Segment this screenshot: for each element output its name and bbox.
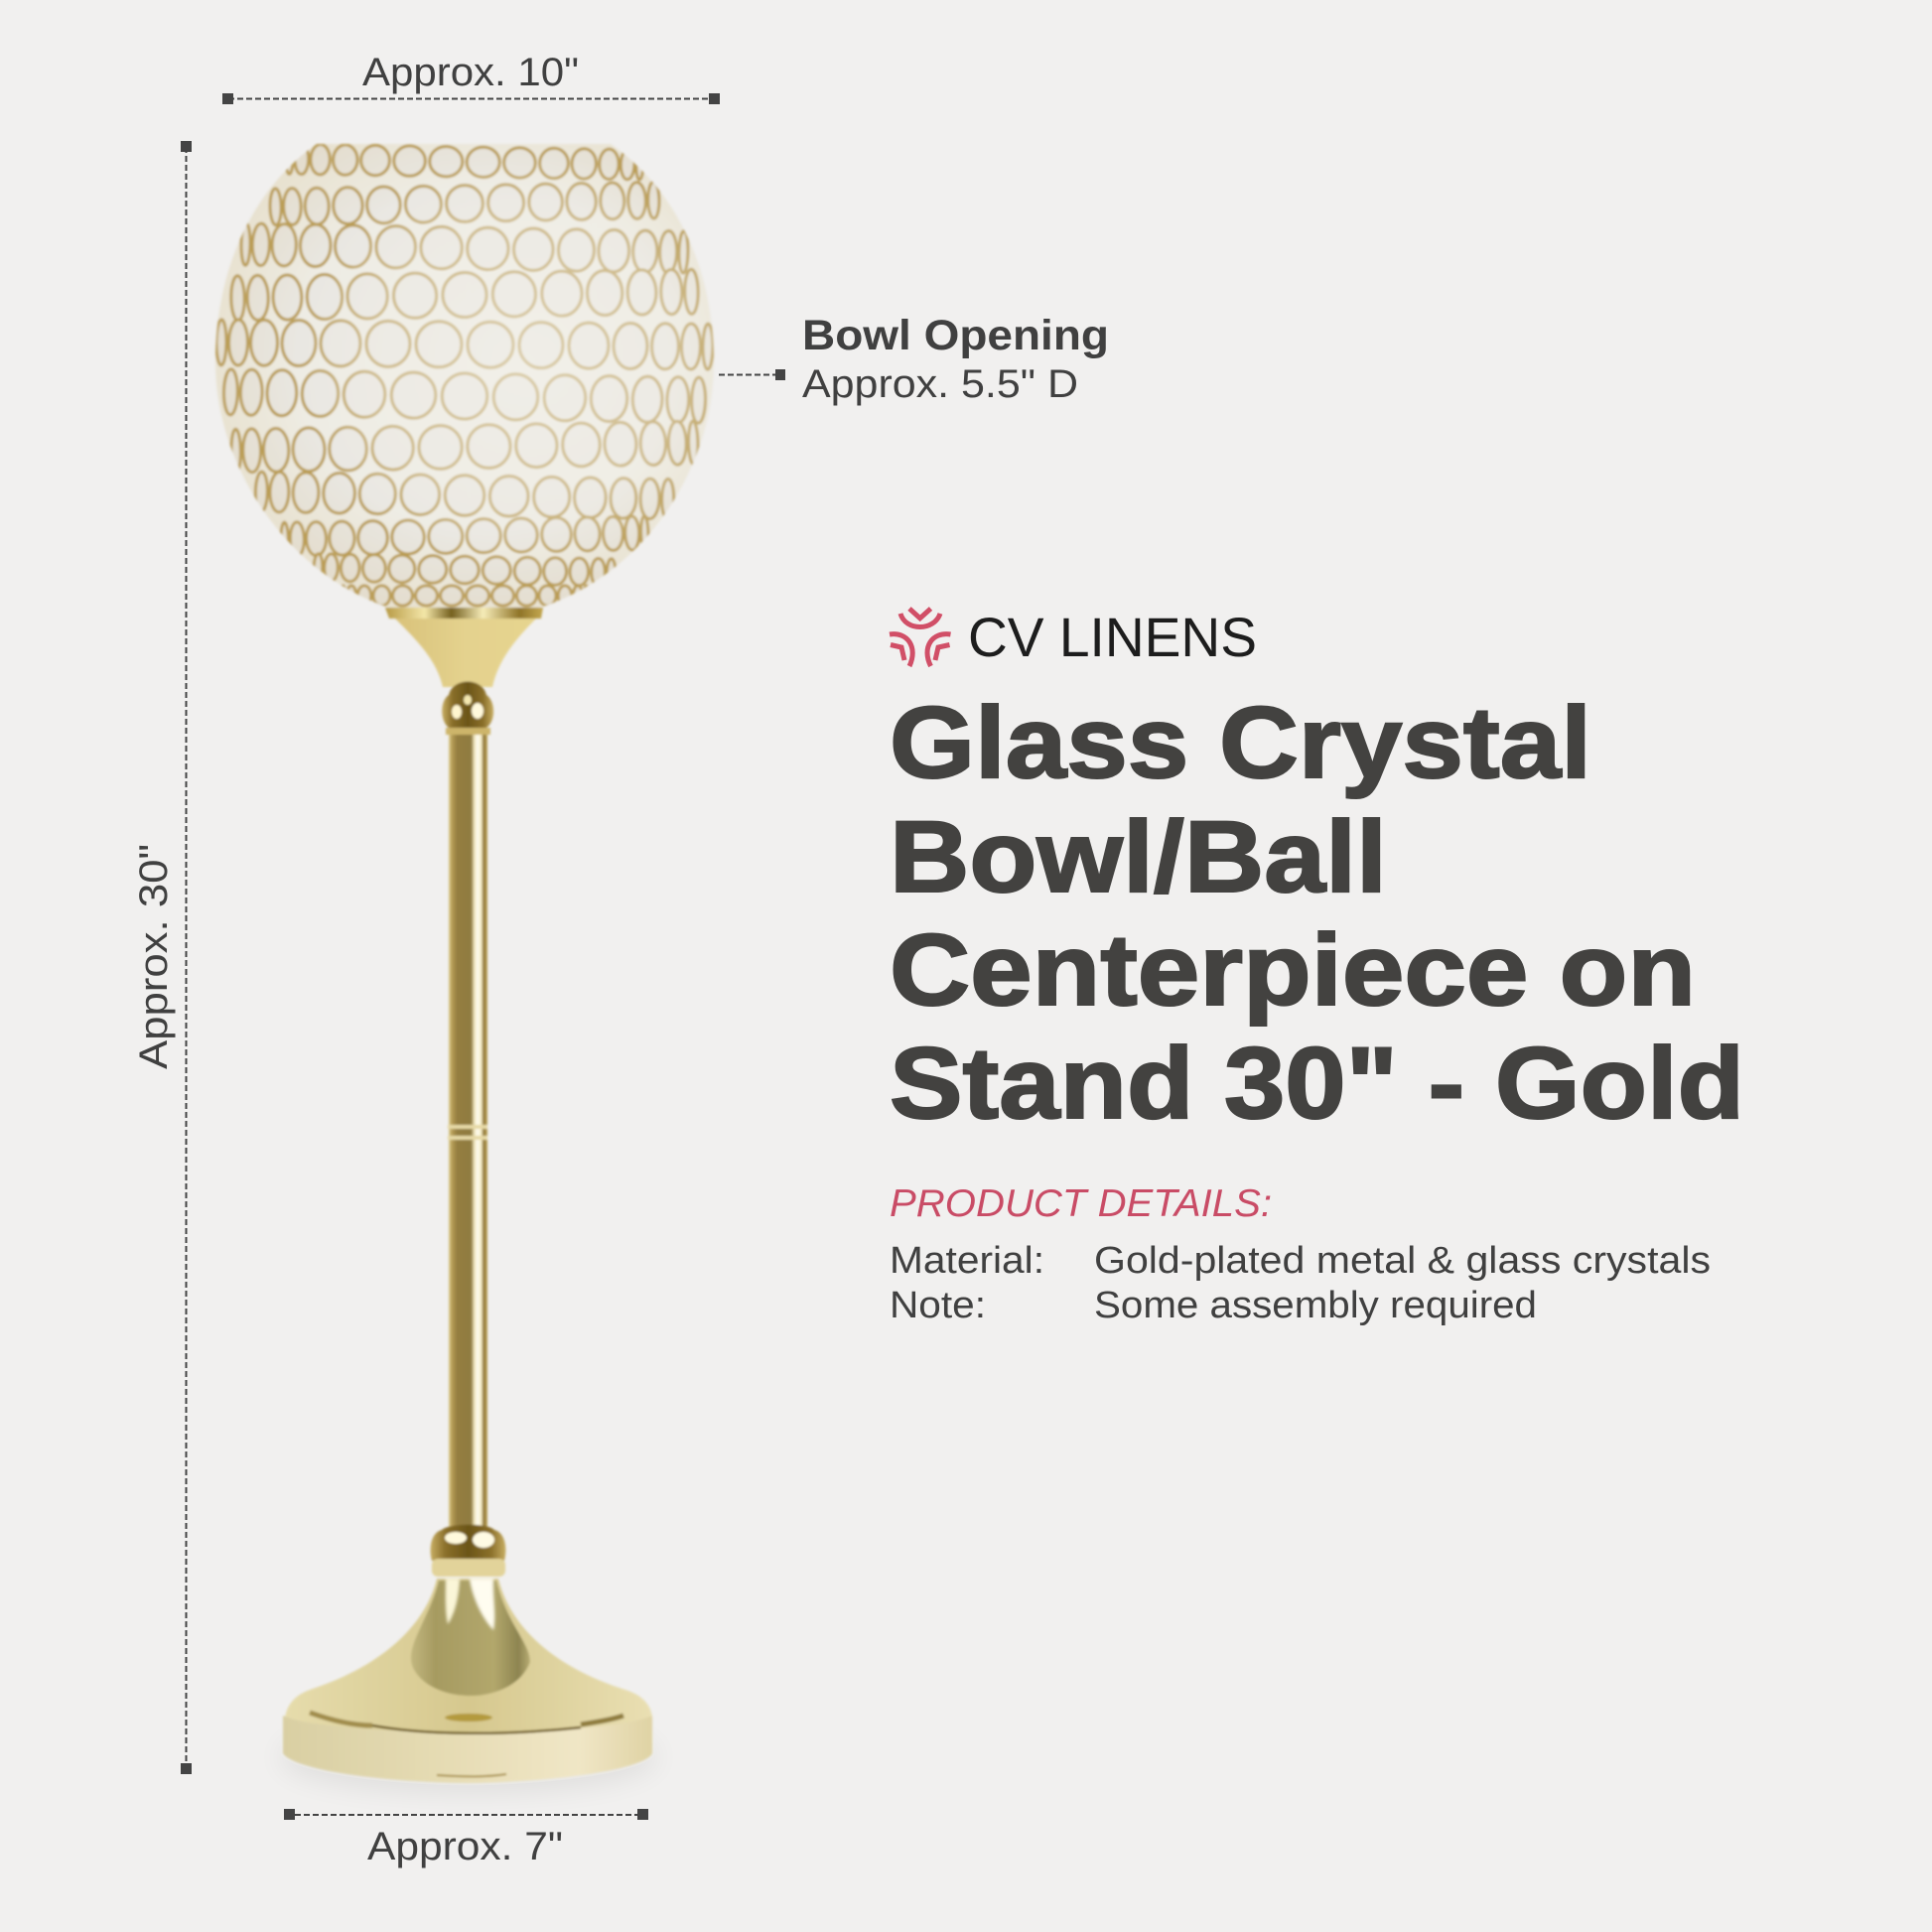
bowl collar xyxy=(385,608,543,619)
stem rod xyxy=(449,733,487,1527)
title: Centerpiece on xyxy=(890,913,1696,1027)
soft base shadow xyxy=(280,1722,657,1793)
funnel cup xyxy=(395,619,536,687)
title: Bowl/Ball xyxy=(890,800,1387,913)
bowl opening callout: Approx. 5.5" D xyxy=(802,362,1078,406)
infographic canvas xyxy=(139,58,1738,1868)
base groove center xyxy=(372,1725,581,1733)
crystal ball bowl xyxy=(208,139,720,616)
stem band xyxy=(448,1125,487,1129)
dimension: base width xyxy=(284,1809,648,1868)
title xyxy=(890,686,1744,1140)
stem band lower xyxy=(448,1136,487,1140)
dimension: top width xyxy=(222,51,720,104)
flare highlight left xyxy=(446,1579,460,1624)
stem top ring xyxy=(446,728,490,735)
upper knob xyxy=(442,681,493,728)
center bump xyxy=(445,1714,492,1722)
product details table: Some assembly required xyxy=(1094,1285,1537,1326)
product details table: Gold-plated metal & glass crystals xyxy=(1094,1240,1711,1282)
base puck xyxy=(283,1716,652,1783)
icon: CV Linens mark xyxy=(890,609,951,666)
bowl opening callout: Bowl Opening xyxy=(802,312,1109,359)
product details table: Note: xyxy=(890,1285,986,1326)
bowl opening callout xyxy=(719,312,1109,406)
dimension: base width: Approx. 7" xyxy=(367,1825,563,1868)
flared base xyxy=(283,1579,652,1732)
base groove right xyxy=(581,1716,623,1725)
base groove xyxy=(310,1713,372,1725)
title: Glass Crystal xyxy=(890,686,1591,799)
product details table xyxy=(890,1240,1711,1326)
reflection on flare xyxy=(411,1581,530,1696)
base front highlight xyxy=(437,1774,506,1776)
flare highlight right xyxy=(470,1579,494,1630)
product details table: Material: xyxy=(890,1240,1044,1282)
lower knob ring xyxy=(432,1559,505,1577)
product photo: crystal bowl centerpiece on gold stand xyxy=(208,139,720,1793)
dimension: height xyxy=(132,141,192,1774)
product details heading: PRODUCT DETAILS: xyxy=(890,1182,1272,1225)
lower knob xyxy=(431,1525,505,1561)
dimension: height: Approx. 30" xyxy=(132,844,176,1069)
title: Stand 30" - Gold xyxy=(890,1027,1744,1140)
brand logo: CV LINENS xyxy=(968,606,1257,668)
dimension: top width: Approx. 10" xyxy=(362,51,579,94)
